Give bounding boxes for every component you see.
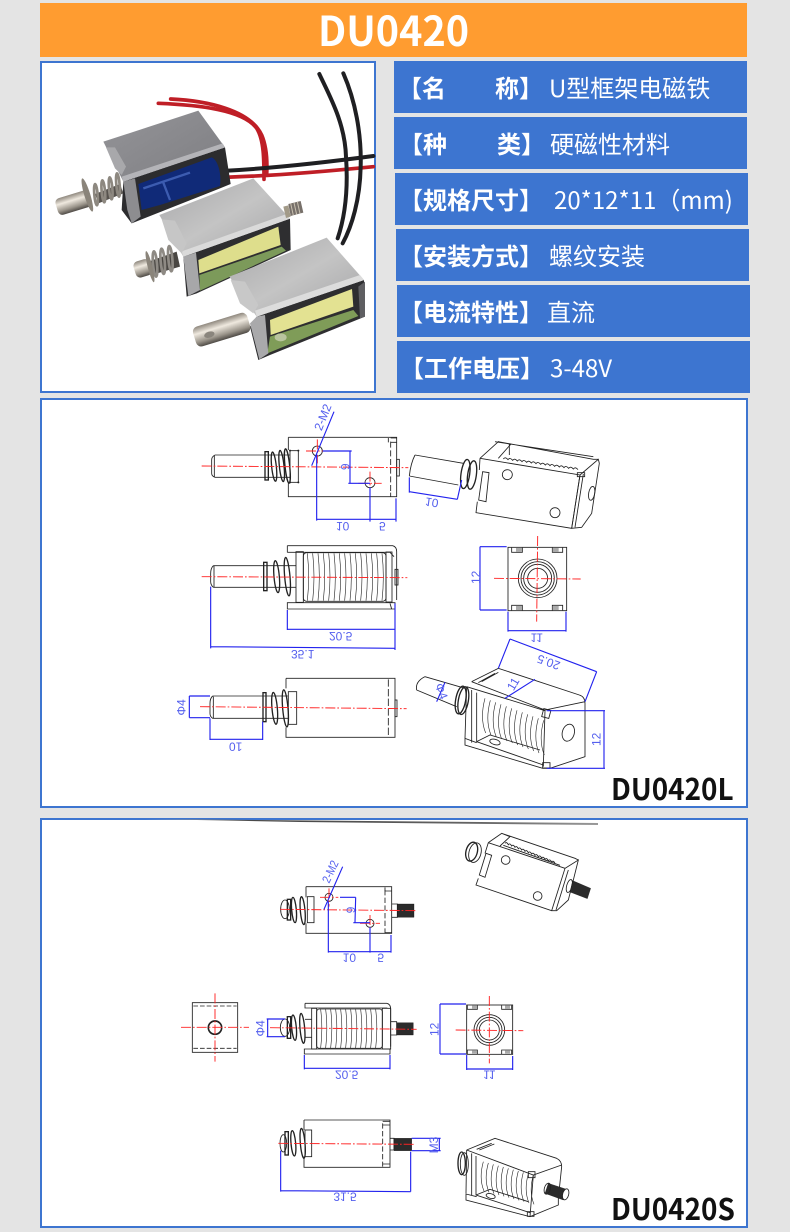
side view with threaded stud: 10 [343,950,356,964]
side view with stud dimension: 31.5 [333,1190,357,1204]
isometric view with coil: 20.5 [535,651,562,673]
side view with pin diameter [174,678,407,754]
side view with threaded stud: 6 [343,907,357,914]
end view [428,996,523,1082]
section view with coil: Φ4 [254,1020,268,1036]
row: dimensions: 20*12*11（mm) [554,181,733,216]
row: mounting: 螺纹安装 [549,237,645,272]
isometric view with coil [416,639,605,768]
row: voltage: 3-48V [550,349,612,384]
spec table [394,61,750,393]
panel: DU0420L drawings [41,399,747,809]
end view [469,536,581,644]
row: type: 【种 [399,125,447,160]
isometric view with coil: Φ4 [432,681,451,702]
photo of three solenoids [54,73,373,360]
row: name [394,61,747,113]
row: current: 【电流特性】 [399,293,543,328]
row: current: 直流 [547,293,595,328]
solenoid with blue coil [54,111,231,223]
section view with coil [254,1003,417,1081]
row: mounting: 【安装方式】 [399,237,543,272]
isometric view with plunger: 10 [424,494,440,510]
panel: product photo [41,62,375,392]
side view with stud dimension [278,1120,441,1204]
red wires [158,99,373,179]
upper DU0420L drawings [202,402,599,661]
side view with mounting holes [202,402,408,533]
end view: 11 [530,630,543,644]
middle DU0420S drawings [181,993,523,1082]
end view: 11 [483,1068,496,1082]
row: type: 类】 [497,125,545,160]
solenoid with yellow coil and threaded stud [132,178,303,297]
top edge scan line [145,819,598,825]
isometric view with threaded stud [458,1138,570,1217]
end view: 12 [469,570,483,584]
title banner [40,0,747,58]
panel: DU0420S drawings [41,819,747,1229]
isometric view with plunger [409,442,599,528]
side view with mounting holes: 10 [336,519,350,533]
row: name: U型框架电磁铁 [549,69,710,104]
side view with threaded stud [280,859,417,964]
row: voltage [397,341,750,393]
lower DU0420S drawings [278,1120,570,1217]
side view with pin diameter: Φ4 [174,699,188,715]
row: name: 【名 [398,69,446,104]
back view [181,993,249,1062]
model label: DU0420S: DU0420S [611,1187,735,1229]
lower DU0420L drawings [174,639,605,768]
end view: 12 [428,1022,442,1036]
section view with coil: 20.5 [335,1067,359,1081]
upper DU0420S drawings [280,833,591,964]
model label: DU0420L: DU0420L [611,767,734,809]
row: name: 称】 [495,69,543,104]
row: voltage: 【工作电压】 [400,349,544,384]
isometric view with coil: 11 [504,675,523,693]
row: mounting [396,229,749,281]
side view with threaded stud: 5 [377,950,384,964]
section view with coil: 35.1 [291,647,315,661]
row: dimensions: 【规格尺寸】 [399,181,543,216]
side view with threaded stud: 2-M2 [320,859,342,885]
isometric view with coil: 12 [590,732,604,746]
row: current [397,285,750,337]
row: dimensions [395,173,748,225]
row: type: 硬磁性材料 [550,125,670,160]
side view with mounting holes: 2-M2 [311,402,335,432]
side view with pin diameter: 10 [229,740,242,754]
side view with mounting holes: 5 [379,519,386,533]
row: type [394,117,747,169]
isometric view with threaded stud [464,833,591,911]
section view with coil [202,546,407,661]
side view with stud dimension: M3 [427,1136,441,1153]
side view with mounting holes: 6 [338,463,352,470]
solenoid with yellow coil and plain plunger [192,238,365,360]
black wires [222,73,373,243]
section view with coil: 20.5 [329,629,353,643]
